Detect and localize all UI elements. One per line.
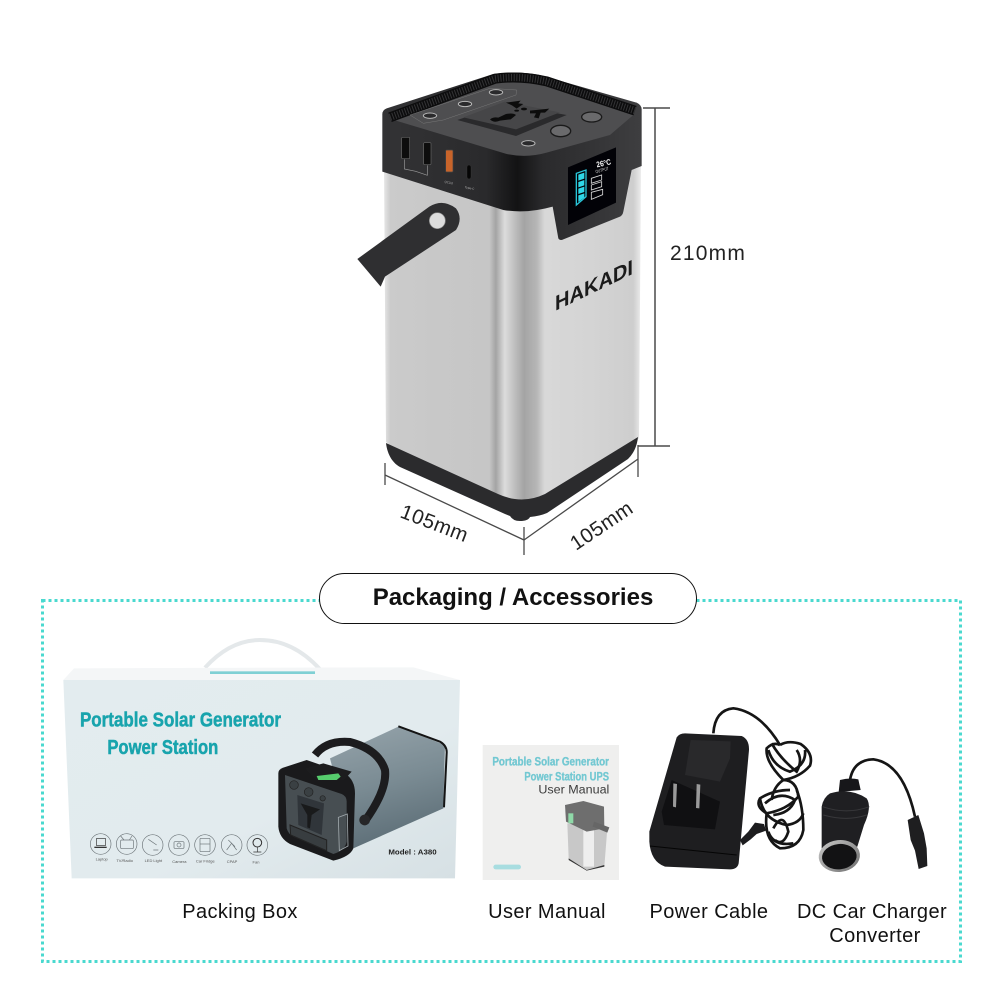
mini buttons	[290, 781, 325, 801]
appliance labels: Fan	[253, 860, 259, 865]
socket rim	[817, 838, 862, 874]
appliance labels	[96, 857, 259, 865]
box lid	[63, 667, 460, 680]
dotted accessories frame	[42, 600, 960, 962]
manual product picture	[565, 801, 609, 871]
USB ports	[402, 137, 431, 165]
mini battery bar	[317, 773, 341, 780]
caption: Power Cable: Power Cable	[650, 901, 768, 923]
display button	[582, 112, 602, 122]
box title: Portable Solar Generator	[80, 710, 281, 732]
box shell	[63, 640, 460, 878]
socket opening	[821, 842, 858, 871]
adapter seam	[650, 846, 737, 855]
accessory: DC car charger converter	[817, 759, 927, 874]
label 210mm: 210mm	[670, 242, 746, 265]
DC ports	[423, 90, 535, 146]
DC plug	[908, 815, 927, 869]
top section, drawn in zoomed coordinates	[357, 73, 642, 287]
AC socket block	[457, 104, 567, 136]
box product picture	[278, 726, 447, 861]
appliance labels: Laptop	[96, 857, 109, 862]
temperature readout: 26°C	[596, 157, 612, 169]
mini screen	[305, 763, 352, 781]
mini strap	[315, 742, 385, 821]
appliance labels: LED Light	[145, 858, 163, 863]
Type-C port	[467, 165, 471, 179]
DC plug	[740, 823, 766, 845]
adapter plug base	[662, 780, 720, 829]
box handle	[205, 640, 320, 669]
adapter body	[649, 733, 749, 869]
accessory: user manual	[483, 745, 619, 880]
caption: User Manual: User Manual	[488, 901, 606, 923]
socket body	[822, 791, 869, 848]
port labels: Type-C	[464, 185, 476, 191]
battery icon	[576, 170, 586, 205]
status icons	[591, 175, 603, 199]
appliance labels: Car Fridge	[196, 859, 216, 864]
socket ribs	[823, 807, 869, 818]
heading pill: Packaging / Accessories: Packaging / Accessories	[373, 584, 653, 611]
converter cord	[850, 759, 915, 817]
label 105mm right: 105mm	[566, 496, 638, 555]
black base	[386, 437, 638, 521]
top section, drawn in zoomed coordinates: OUTPUT	[595, 166, 609, 174]
accessory: user manual: Power Station UPS	[524, 769, 609, 783]
black band	[382, 73, 642, 240]
caption: Packing Box: Packing Box	[182, 901, 298, 923]
mini port strip	[290, 825, 327, 851]
box shell: Power Station	[107, 737, 218, 759]
accessory: user manual: User Manual	[538, 783, 609, 797]
manual cover	[483, 745, 619, 880]
mini socket	[297, 795, 324, 835]
strap eyelet	[429, 213, 445, 229]
appliance labels: Camera	[172, 859, 187, 864]
port outline	[410, 88, 517, 123]
socket neck	[839, 778, 861, 792]
mini end cap	[278, 760, 355, 861]
top vent ring	[390, 77, 635, 117]
width dimension left	[385, 463, 524, 555]
accessory: packing box	[63, 640, 460, 878]
mini socket pattern	[301, 803, 320, 828]
width dimension right	[524, 445, 638, 540]
appliance labels: TV/Radio	[116, 858, 134, 863]
label 105mm left: 105mm	[397, 500, 472, 547]
appliance icons	[90, 834, 268, 855]
caption: DC Car Charger Converter: Converter	[829, 925, 921, 947]
port labels: QC3.0	[444, 180, 454, 186]
silver body	[384, 165, 641, 501]
heading pill: Packaging / Accessories	[320, 574, 696, 624]
QC3.0 port	[446, 150, 453, 172]
mini edge outline	[398, 726, 447, 807]
manual title: Portable Solar Generator	[492, 754, 609, 768]
handle strip	[210, 671, 315, 674]
strap	[357, 203, 460, 287]
top face	[392, 80, 633, 156]
mini body	[330, 727, 445, 848]
adapter cord and coil	[713, 708, 811, 848]
socket holes	[490, 101, 549, 122]
model pill	[493, 865, 521, 869]
mini strap rivet	[359, 815, 370, 825]
caption: DC Car Charger Converter: DC Car Charger	[797, 901, 947, 923]
box front	[63, 680, 460, 878]
mini side ports	[338, 814, 348, 851]
mini face	[285, 775, 347, 854]
port labels	[444, 180, 476, 191]
brand: HAKADI: HAKADI	[555, 255, 633, 316]
accessory: power cable	[649, 708, 811, 869]
model label: Model : A380	[388, 850, 437, 857]
appliance labels: CPAP	[227, 859, 238, 864]
power button	[551, 125, 571, 137]
adapter face detail	[685, 740, 731, 782]
adapter pins	[673, 783, 700, 808]
height dimension	[638, 108, 670, 446]
product: power station	[357, 73, 642, 521]
LCD screen	[568, 147, 616, 225]
universal socket	[463, 102, 560, 129]
port bracket	[404, 159, 427, 175]
